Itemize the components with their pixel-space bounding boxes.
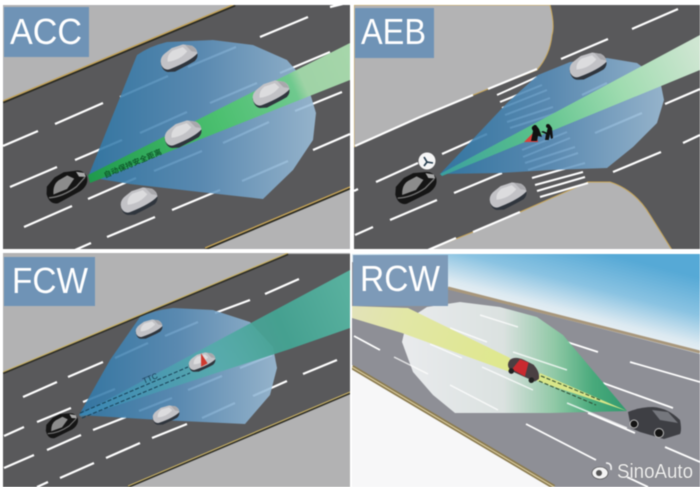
- lane markings over fan: [394, 315, 627, 428]
- radar fan: [79, 308, 277, 424]
- watermark: SinoAuto: SinoAuto: [617, 461, 693, 483]
- beam text: 自动保持安全距离: [102, 146, 164, 180]
- car: lower: [120, 186, 158, 216]
- lower-left ground: [352, 366, 556, 487]
- label: RCW: RCW: [360, 258, 440, 299]
- car: ego: [45, 412, 78, 439]
- pedestrians with warning triangle: [524, 124, 553, 142]
- road: [3, 5, 350, 249]
- lane markings: [3, 3, 350, 250]
- icon: warning bubble: [418, 152, 436, 170]
- radar fan: [440, 58, 664, 174]
- zebra crossing: [497, 77, 588, 197]
- car: ego: [394, 171, 437, 204]
- car: warning target: [188, 352, 216, 372]
- label: ACC: ACC: [10, 11, 82, 52]
- road edge lines: [3, 254, 350, 487]
- car: lower: [152, 404, 180, 426]
- yellow beam: [352, 306, 510, 372]
- panel: FCW: [3, 253, 350, 487]
- car: top: [569, 52, 608, 80]
- car: lead top: [160, 44, 198, 72]
- upper-left kerb area: [354, 5, 553, 147]
- car: warning target: [504, 355, 543, 385]
- panel: ACC: [3, 3, 350, 250]
- teal beam: [79, 270, 350, 417]
- road: [3, 254, 350, 487]
- road: [352, 262, 700, 487]
- label: AEB: AEB: [361, 11, 426, 52]
- lane markings: [354, 336, 700, 487]
- panel: AEB: [354, 5, 700, 250]
- car: centre: [164, 120, 202, 149]
- near road edge: [352, 367, 554, 487]
- car: lower: [489, 182, 527, 210]
- lower kerb area: [428, 182, 672, 250]
- lane markings: [4, 279, 337, 487]
- car: upper: [135, 318, 163, 340]
- green beam: [88, 43, 350, 183]
- TTC dashed lines: TTC: [141, 371, 159, 386]
- car: ego: [628, 407, 681, 439]
- far road edge: [448, 288, 700, 352]
- radar fan: [402, 302, 627, 413]
- label: FCW: FCW: [12, 260, 88, 301]
- TTC dashed lines: [80, 367, 190, 418]
- panel: RCW: [352, 254, 700, 487]
- radar fan: [88, 40, 316, 199]
- green beam: [440, 35, 700, 176]
- car: ego: [46, 170, 88, 204]
- lane markings: [354, 9, 700, 250]
- road edge lines: [3, 5, 350, 249]
- car: right: [252, 80, 290, 109]
- TTC dashed link: [537, 373, 627, 411]
